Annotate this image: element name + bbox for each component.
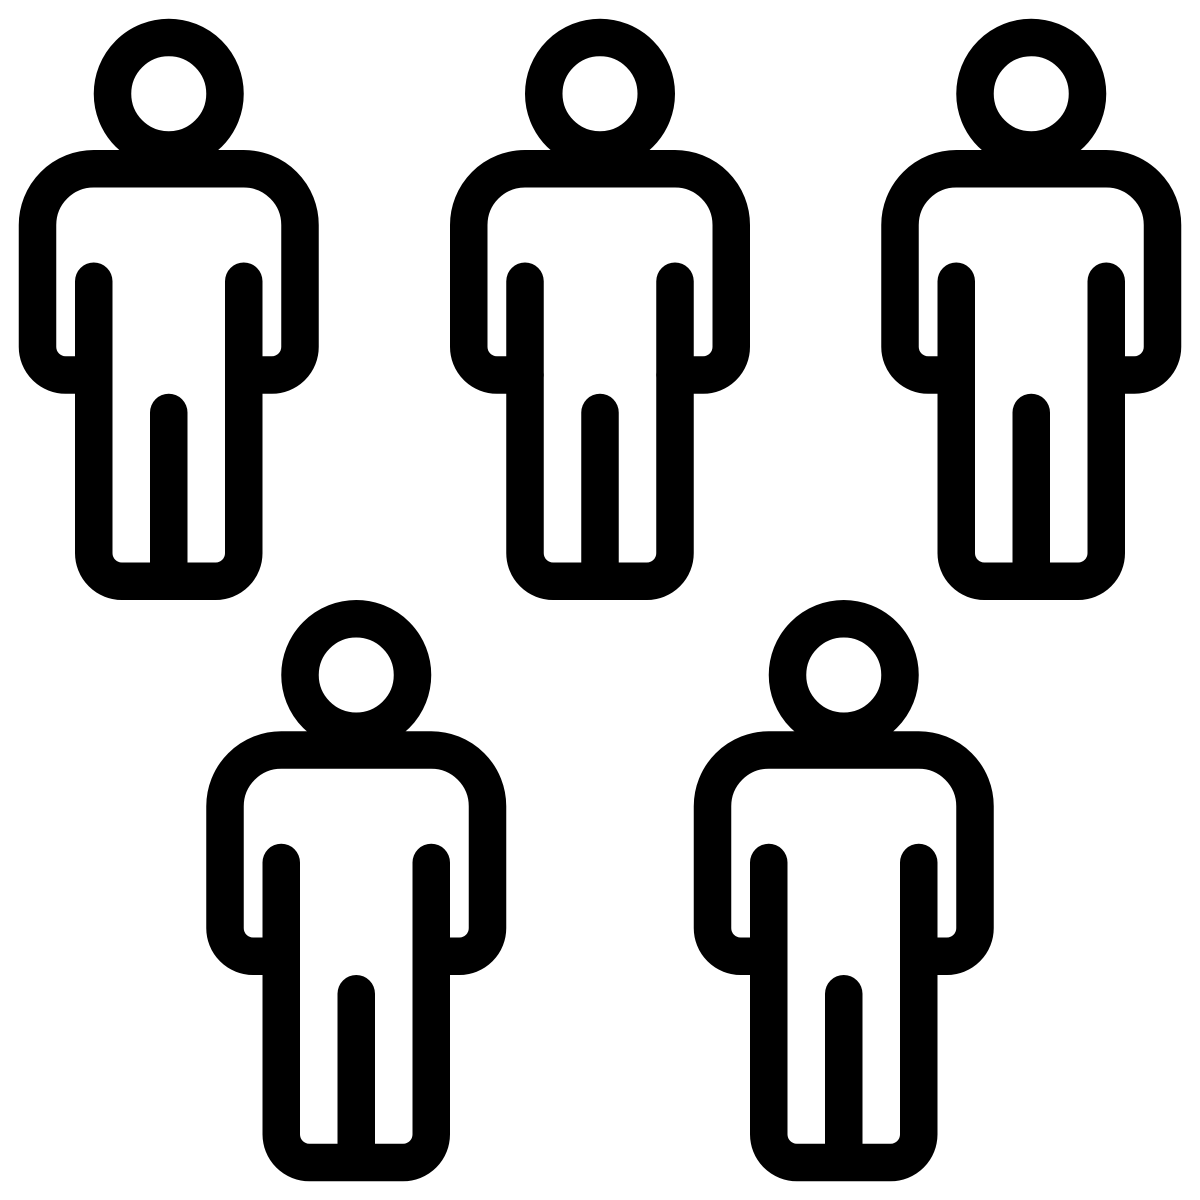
icon: person bottom left	[225, 619, 488, 1162]
icon: person bottom right	[712, 619, 975, 1162]
icon: person top right	[900, 38, 1162, 581]
icon: person top centre	[469, 38, 731, 581]
icon: person top left	[38, 38, 300, 581]
